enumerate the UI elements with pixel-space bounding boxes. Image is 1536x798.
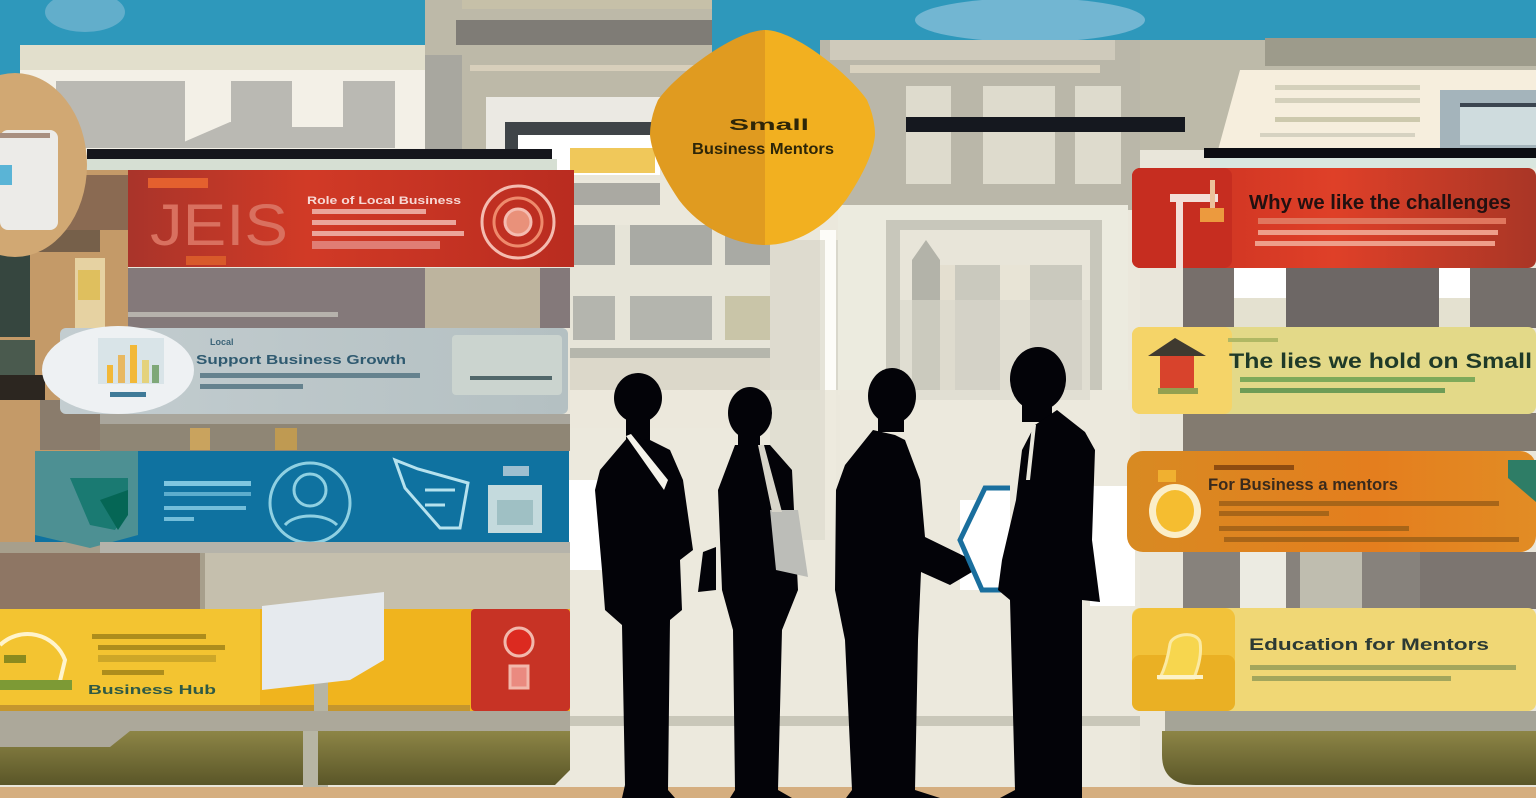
icon: coin	[1149, 470, 1201, 538]
white sign	[262, 592, 384, 790]
icon: round badge	[0, 634, 72, 690]
heading: For Business a mentors	[1208, 475, 1398, 494]
red tab	[471, 609, 570, 711]
title	[692, 117, 834, 158]
text block	[88, 634, 225, 697]
icon: hand	[395, 460, 468, 528]
title: Small	[729, 117, 809, 134]
icon: bar chart	[42, 326, 194, 414]
ground right	[1162, 711, 1536, 785]
panel: yellow right	[1132, 608, 1536, 711]
icon: teal shield	[35, 451, 138, 548]
icon: T sign	[1170, 180, 1224, 268]
dark banner on facade	[906, 117, 1185, 132]
heading: Why we like the challenges	[1249, 192, 1511, 214]
black rail left	[87, 149, 557, 170]
figure: person 3	[835, 368, 972, 798]
building: right lower wall	[1183, 268, 1536, 609]
text block	[1214, 465, 1519, 542]
panel: yellow left	[0, 592, 570, 790]
building: central facade	[560, 40, 1140, 798]
black rail right	[1204, 148, 1536, 168]
tablet: blue arc	[960, 488, 1010, 590]
panel: pale yellow right	[1132, 327, 1536, 414]
bottom strip	[0, 787, 1536, 798]
building: left brown shopfront	[0, 170, 128, 610]
text block	[164, 481, 251, 521]
badge: gold diamond title	[650, 30, 875, 245]
sky	[0, 0, 1536, 75]
text block: Business Hub	[88, 682, 216, 697]
text block	[1255, 218, 1506, 246]
figure: person 2	[718, 387, 808, 798]
building: upper centre tower	[425, 0, 712, 175]
text block: Support Business Growth	[196, 352, 406, 367]
text block	[1250, 665, 1516, 681]
panel: orange right	[1127, 451, 1536, 552]
left round badge	[0, 73, 87, 257]
ground left	[0, 711, 570, 788]
panel: red left	[128, 170, 574, 267]
icon: target	[482, 186, 554, 258]
icon: building	[488, 466, 542, 533]
title: Business Mentors	[692, 141, 834, 158]
left mid wall	[0, 268, 570, 610]
text block: Local	[210, 337, 234, 347]
figure: person 1	[595, 373, 716, 798]
icon: small house	[1148, 338, 1206, 394]
heading: big label: JEIS	[150, 193, 288, 258]
icon: lightbulb	[505, 628, 533, 688]
building: left white block	[20, 45, 425, 155]
panel: grey left	[42, 326, 568, 414]
text block: Role of Local Business	[307, 195, 461, 207]
panel: blue left	[35, 451, 569, 548]
text block	[307, 195, 464, 249]
text block	[110, 337, 420, 397]
text block	[1228, 338, 1475, 393]
icon: green shield	[1508, 460, 1536, 502]
icon: globe	[270, 463, 350, 543]
panel: red right	[1132, 168, 1536, 268]
heading: Education for Mentors	[1249, 635, 1489, 654]
heading: The lies we hold on Small	[1229, 350, 1532, 373]
figure: person 4	[998, 347, 1100, 798]
icon: bell	[1157, 635, 1203, 679]
building: right cream block	[1140, 38, 1536, 150]
